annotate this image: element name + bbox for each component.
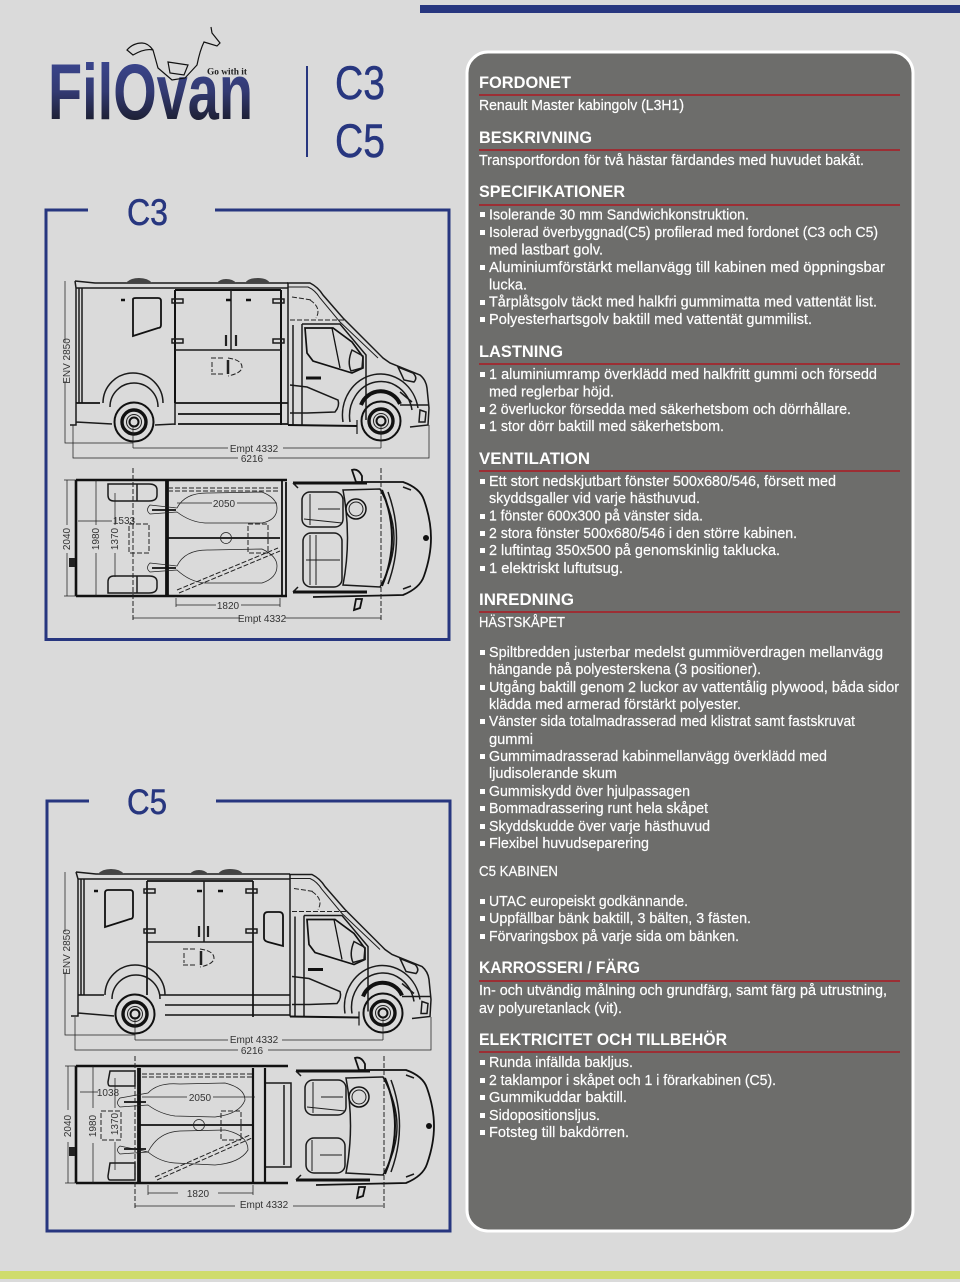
section: inredning: klädda med armerad förstärkt polyester. (489, 697, 741, 713)
section: lastning: 2 överluckor försedda med säkerhetsbom och dörrhållare. (489, 402, 851, 418)
C3 floor plan dimensions: 1370 (110, 527, 121, 550)
section: inredning: hängande på polyesterskena (3 positioner). (489, 662, 761, 678)
section: elektricitet (479, 1030, 900, 1141)
C3 side dimensions (62, 281, 429, 465)
section: fordonet (479, 73, 900, 114)
section: specifikationer: SPECIFIKATIONER (479, 182, 625, 201)
model names: C3 (335, 56, 385, 109)
section: lastning (479, 342, 900, 435)
section: ventilation: skyddsgaller vid varje hästhuvud. (489, 491, 700, 507)
C3 floor plan dimensions: Empt 4332 (238, 614, 287, 625)
C3 side dimensions: 6216 (241, 454, 264, 465)
logo: FilOvan (48, 27, 253, 136)
C3 floor plan dimensions: 1820 (217, 601, 240, 612)
section: ventilation: 1 elektriskt luftutsug. (489, 561, 623, 577)
C5 floor plan dimensions: 2050 (189, 1093, 212, 1104)
section: specifikationer: Isolerad överbyggnad(C5) profilerad med fordonet (C3 och C5) (489, 225, 878, 241)
C3 floor plan dimensions: 1980 (91, 527, 102, 550)
section: inredning: Spiltbredden justerbar medelst gummiöverdragen mellanvägg (489, 645, 883, 661)
section: ventilation: 2 stora fönster 500x680/546 i den större kabinen. (489, 526, 797, 542)
C5 heading: C5 (127, 783, 167, 822)
section: lastning: LASTNING (479, 342, 563, 361)
logo tagline: Go with it (207, 68, 248, 78)
section: ventilation: VENTILATION (479, 449, 590, 468)
section: specifikationer (479, 182, 900, 328)
panel: C5 (47, 783, 450, 1231)
section: fordonet: FORDONET (479, 73, 572, 92)
section: lastning: 1 stor dörr baktill med säkerhetsbom. (489, 419, 724, 435)
section: inredning: HÄSTSKÅPET (479, 614, 565, 631)
section: inredning: C5 KABINEN (479, 864, 558, 880)
C5 side dimensions: Empt 4332 (230, 1035, 279, 1046)
bottom green bar (0, 1271, 960, 1279)
section: inredning: Förvaringsbox på varje sida om bänken. (489, 929, 739, 945)
C3 floor plan dimensions (62, 480, 381, 625)
section: inredning: gummi (489, 732, 533, 748)
C5 floor plan drawing (69, 1056, 434, 1210)
section: inredning: INREDNING (479, 590, 574, 609)
C3 side dimensions: ENV 2850 (62, 338, 73, 384)
section: specifikationer: Isolerande 30 mm Sandwichkonstruktion. (489, 208, 749, 224)
section: ventilation: 1 fönster 600x300 på vänster sida. (489, 508, 703, 524)
section: inredning: ljudisolerande skum (489, 766, 617, 782)
C5 floor plan dimensions: 1980 (88, 1114, 99, 1137)
section: elektricitet: 2 taklampor i skåpet och 1 i förarkabinen (C5). (489, 1073, 776, 1089)
section: specifikationer: Aluminiumförstärkt mellanvägg till kabinen med öppningsbar (489, 260, 885, 276)
section: specifikationer: Polyesterhartsgolv baktill med vattentät gummilist. (489, 312, 812, 328)
section: elektricitet: Sidopositionsljus. (489, 1108, 600, 1124)
section: elektricitet: Fotsteg till bakdörren. (489, 1125, 629, 1141)
section: ventilation (479, 449, 900, 577)
C5 floor plan dimensions: 1820 (187, 1189, 210, 1200)
C5 floor plan dimensions: 1038 (97, 1088, 120, 1099)
C3 side view drawing (70, 278, 429, 442)
section: ventilation: 2 luftintag 350x500 på genomskinlig taklucka. (489, 543, 780, 559)
C3 floor plan dimensions: 1533 (113, 516, 136, 527)
C5 side dimensions: 6216 (241, 1046, 264, 1057)
C5 floor plan dimensions: 2040 (63, 1114, 74, 1137)
section: inredning (479, 590, 900, 945)
C5 floor plan dimensions (63, 1066, 383, 1211)
logo wordmark: FilOvan (48, 47, 253, 136)
top blue bar (420, 5, 960, 13)
section: inredning: Gummimadrasserad kabinmellanvägg överklädd med (489, 749, 827, 765)
section: elektricitet: Gummikuddar baktill. (489, 1090, 627, 1106)
logo horse outline (127, 27, 220, 80)
section: specifikationer: med lastbart golv. (489, 242, 603, 258)
section: beskrivning: Transportfordon för två hästar färdandes med huvudet bakåt. (479, 153, 864, 169)
C5 floor plan dimensions: Empt 4332 (240, 1200, 289, 1211)
section: elektricitet: ELEKTRICITET OCH TILLBEHÖR (479, 1030, 727, 1049)
C3 side dimensions: Empt 4332 (230, 444, 279, 455)
section: ventilation: Ett stort nedskjutbart fönster 500x680/546, försett med (489, 474, 836, 490)
C3 floor plan dimensions: 2040 (62, 527, 73, 550)
section: karrosseri: av polyuretanlack (vit). (479, 1001, 622, 1017)
C5 side dimensions (62, 872, 431, 1057)
section: inredning: Flexibel huvudseparering (489, 836, 649, 852)
section: karrosseri: In- och utvändig målning och grundfärg, samt färg på utrustning, (479, 983, 887, 999)
model names (335, 56, 385, 167)
section: lastning: 1 aluminiumramp överklädd med halkfritt gummi och försedd (489, 367, 877, 383)
model names: C5 (335, 114, 385, 167)
section: inredning: Vänster sida totalmadrasserad med klistrat samt fastskruvat (489, 714, 855, 730)
section: specifikationer: lucka. (489, 278, 527, 294)
C3 floor plan dimensions: 2050 (213, 499, 236, 510)
section: inredning: UTAC europeiskt godkännande. (489, 894, 688, 910)
section: inredning: Gummiskydd över hjulpassagen (489, 784, 690, 800)
C3 frame (46, 210, 449, 640)
panel: C3 (46, 192, 449, 640)
section: beskrivning: BESKRIVNING (479, 128, 592, 147)
header divider (306, 66, 308, 157)
C3 heading: C3 (127, 192, 168, 233)
section: elektricitet: Runda infällda bakljus. (489, 1055, 633, 1071)
section: karrosseri: KARROSSERI / FÄRG (479, 958, 640, 977)
section: inredning: Utgång baktill genom 2 luckor av vattentålig plywood, båda sidor (489, 680, 899, 696)
section: lastning: med reglerbar höjd. (489, 384, 614, 400)
panel background (467, 52, 913, 1231)
C5 side dimensions: ENV 2850 (62, 929, 73, 975)
C5 side view drawing (71, 869, 431, 1034)
section: beskrivning (479, 128, 900, 169)
C5 floor plan dimensions: 1370 (110, 1112, 121, 1135)
section: fordonet: Renault Master kabingolv (L3H1) (479, 98, 684, 114)
section: specifikationer: Tårplåtsgolv täckt med halkfri gummimatta med vattentät list. (489, 294, 877, 310)
section: inredning: Uppfällbar bänk baktill, 3 bälten, 3 fästen. (489, 911, 751, 927)
section: inredning: Bommadrassering runt hela skåpet (489, 801, 708, 817)
C5 frame (47, 801, 450, 1231)
section: inredning: Skyddskudde över varje hästhuvud (489, 819, 710, 835)
section: karrosseri (479, 958, 900, 1017)
C3 floor plan drawing (69, 468, 431, 622)
panel: specifications (467, 52, 913, 1231)
